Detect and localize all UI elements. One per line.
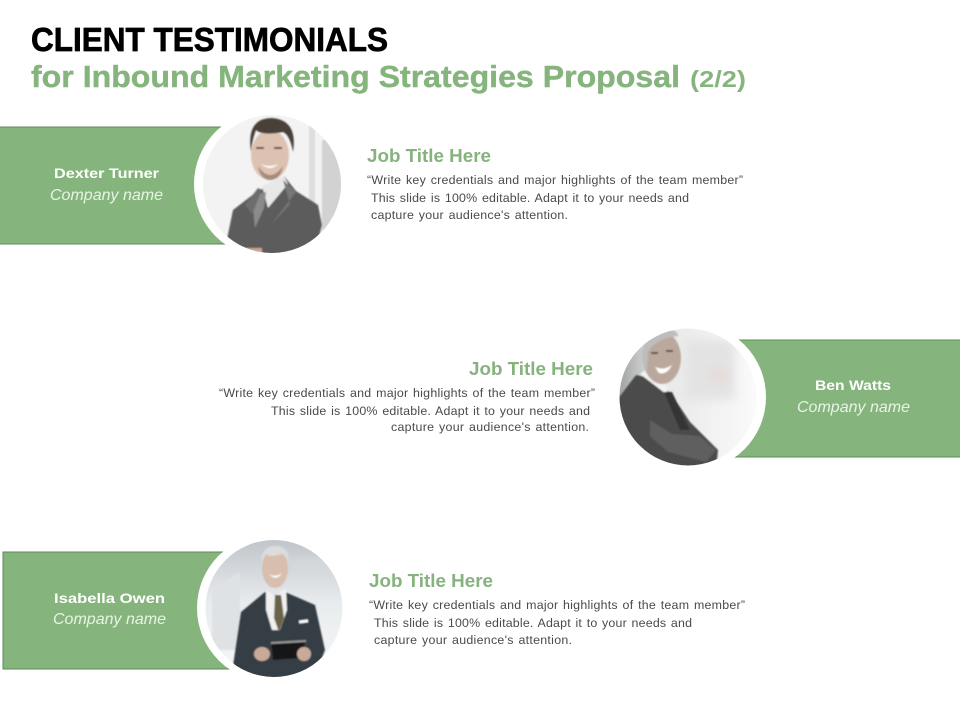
photo: Dexter Turner: [200, 112, 345, 257]
name band: [720, 340, 960, 457]
job title: Job Title Here: [469, 359, 593, 379]
testimonial text: capture your audience's attention.: [371, 208, 568, 222]
photo: Isabella Owen: [206, 540, 342, 677]
company name: Company name: [797, 399, 910, 416]
white ring: [194, 110, 342, 258]
testimonial text: This slide is 100% editable. Adapt it to your needs and: [371, 191, 689, 205]
testimonial text: capture your audience's attention.: [391, 420, 589, 434]
testimonial text: This slide is 100% editable. Adapt it to your needs and: [374, 616, 692, 630]
testimonial text: “Write key credentials and major highlights of the team member”: [369, 598, 745, 612]
testimonial text: [219, 386, 595, 434]
white ring: [618, 323, 766, 471]
name band: [0, 127, 239, 244]
panel: Ben Watts testimonial: [219, 323, 960, 471]
photo: Ben Watts: [620, 328, 744, 466]
job title: Job Title Here: [367, 146, 491, 166]
subheading: proposal name: for Inbound Marketing Strategies Proposal: [31, 59, 680, 94]
testimonial text: capture your audience's attention.: [374, 633, 572, 647]
panel: Isabella Owen testimonial: [3, 534, 745, 683]
name: Isabella Owen: Isabella Owen: [54, 590, 165, 606]
name band: [3, 552, 243, 669]
testimonial text: “Write key credentials and major highlights of the team member”: [367, 173, 743, 187]
name: Ben Watts: Ben Watts: [815, 377, 891, 393]
white ring: [197, 534, 345, 682]
testimonial text: [367, 173, 743, 222]
page counter: (2/2): [690, 66, 746, 92]
name: Dexter Turner: Dexter Turner: [54, 165, 160, 181]
job title: Job Title Here: [369, 571, 493, 591]
testimonial text: [369, 598, 745, 647]
testimonial text: “Write key credentials and major highlights of the team member”: [219, 386, 595, 400]
company name: Company name: [50, 187, 163, 204]
heading: client testimonials: CLIENT TESTIMONIALS: [31, 21, 388, 58]
testimonial text: This slide is 100% editable. Adapt it to your needs and: [271, 404, 590, 418]
panel: Dexter Turner testimonial: [0, 110, 743, 258]
title: [31, 21, 746, 94]
company name: Company name: [53, 611, 166, 628]
